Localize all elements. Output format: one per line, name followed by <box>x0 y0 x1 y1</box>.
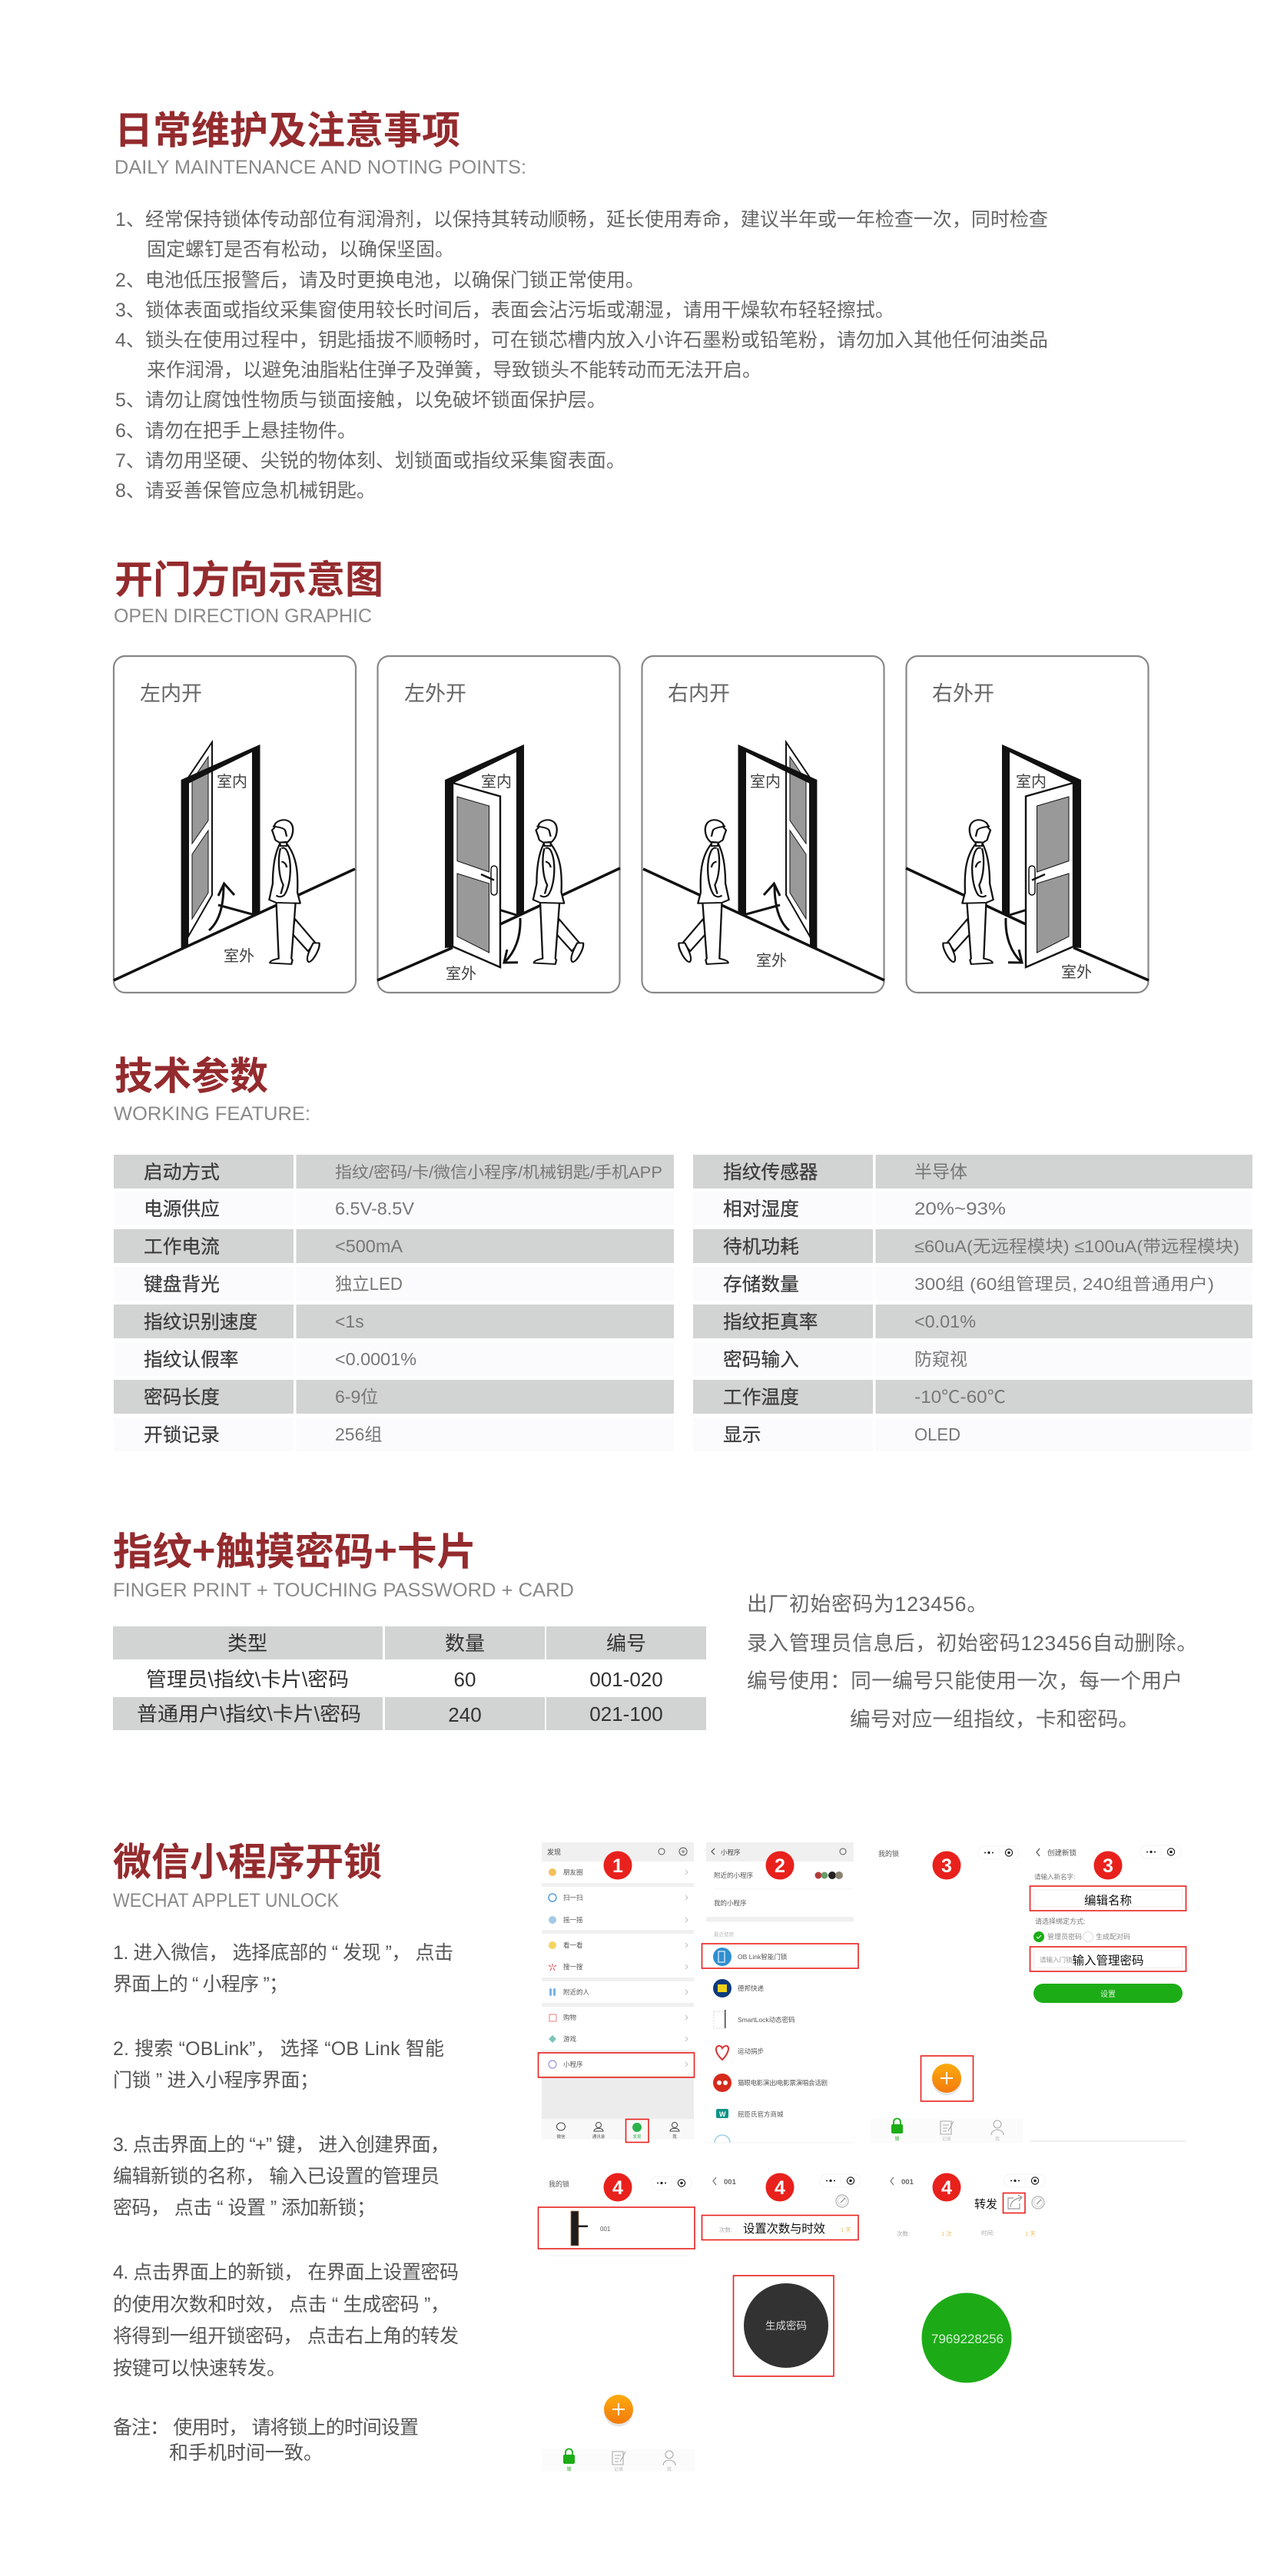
create lock interface: 请输入门锁 <box>1040 1956 1073 1964</box>
my locks list interface <box>542 2177 695 2472</box>
badge: step 4: 4 <box>775 2177 785 2199</box>
highlight: add button <box>921 2056 973 2101</box>
my locks list interface: 我的锁 <box>549 2180 569 2188</box>
figure: person <box>943 820 994 964</box>
create lock interface <box>1030 1845 1186 2141</box>
text block: instructions: 编辑新锁的名称， 输入已设置的管理员 <box>113 2166 440 2187</box>
table text: right labels: 待机功耗 <box>723 1236 799 1258</box>
generated password interface: 次数: <box>897 2230 910 2237</box>
text block: maintenance points: 8、请妥善保管应急机械钥匙。 <box>115 480 376 502</box>
generate password interface: 生成密码 <box>765 2319 807 2332</box>
discover screen interface: 摇一摇 <box>563 1916 583 1924</box>
section: fingerprint password card <box>113 1521 1197 1731</box>
table text: left labels: 密码长度 <box>144 1387 220 1408</box>
table text: user row: 240 <box>448 1703 482 1726</box>
table: technical parameters <box>114 1155 1252 1451</box>
badge: step 3: 3 <box>1103 1855 1113 1877</box>
panel: left inward <box>114 656 356 993</box>
table text: user row <box>137 1702 663 1726</box>
generated password interface: 1 天 <box>1025 2230 1036 2237</box>
create lock interface: 创建新锁 <box>1047 1848 1077 1858</box>
table text: left labels: 指纹识别速度 <box>144 1311 257 1333</box>
label: outdoor: 室外 <box>756 952 787 970</box>
text block: instructions: 备注： 使用时， 请将锁上的时间设置 <box>113 2417 419 2438</box>
table text: left values: <1s <box>335 1311 364 1331</box>
generated password interface: 时间: <box>981 2229 994 2236</box>
panel: right inward <box>642 656 884 993</box>
highlight: name field <box>1030 1886 1186 1911</box>
table text: right values: 20%~93% <box>914 1198 1006 1218</box>
discover screen interface: 扫一扫 <box>563 1894 583 1901</box>
text block: instructions <box>113 1942 459 2464</box>
create lock interface: 管理员密码 <box>1047 1932 1082 1941</box>
table text: left values: 6-9位 <box>335 1387 378 1407</box>
create lock interface: 请输入新名字: <box>1034 1873 1075 1881</box>
text block: maintenance points: 2、电池低压报警后，请及时更换电池，以确保门锁正常使用。 <box>115 270 645 291</box>
generated password interface <box>891 2174 1045 2383</box>
mini program list interface: 猫眼电影演出l电影票演唱会话剧 <box>738 2079 828 2087</box>
table text: left labels: 开锁记录 <box>144 1424 220 1446</box>
figure: person <box>269 820 320 964</box>
table text: admin row: 60 <box>454 1668 476 1691</box>
mini program list interface: OB Link智能门锁 <box>738 1953 788 1961</box>
screenshot: generated password <box>891 2173 1045 2383</box>
table text: right labels: 显示 <box>723 1425 761 1446</box>
create lock interface: 设置 <box>1100 1990 1116 1999</box>
text block: instructions: 按键可以快速转发。 <box>113 2358 286 2379</box>
section: working feature <box>114 1046 1252 1451</box>
generated password interface: 1 次 <box>941 2230 952 2237</box>
generated password interface: 001 <box>901 2178 914 2186</box>
text block: initial password note: 录入管理员信息后，初始密码123456自动删除。 <box>747 1632 1197 1655</box>
create lock interface: 生成配对码 <box>1096 1932 1130 1941</box>
label: right inward: 右内开 <box>668 682 730 705</box>
badge: step 4 <box>765 2173 795 2202</box>
section: daily maintenance <box>114 100 1048 502</box>
table text: left values: <500mA <box>335 1236 403 1256</box>
text block: maintenance points: 来作润滑，以避免油脂粘住弹子及弹簧，导致锁头不能转动而无法开启。 <box>147 360 761 381</box>
heading: working feature: 技术参数 <box>114 1046 268 1101</box>
table text: right labels: 存储数量 <box>723 1274 799 1295</box>
panel: left outward <box>377 656 620 993</box>
badge: step 4 <box>604 2173 632 2202</box>
discover screen interface: 小程序 <box>563 2060 583 2068</box>
table text: left values: 独立LED <box>335 1274 403 1294</box>
table text: admin row: 管理员\指纹\卡片\密码 <box>146 1668 349 1691</box>
callout: enter admin password: 输入管理密码 <box>1072 1954 1144 1968</box>
label: left inward: 左内开 <box>140 682 202 705</box>
table text: right labels: 指纹拒真率 <box>723 1311 818 1333</box>
callout: forward: 转发 <box>974 2198 997 2211</box>
text block: initial password note: 编号使用：同一编号只能使用一次，每一个用户 <box>747 1669 1183 1692</box>
mini program list interface: 最近使用 <box>714 1931 734 1938</box>
mini program list interface: 屈臣氏官方商城 <box>738 2110 784 2118</box>
table text: right values: OLED <box>914 1424 960 1444</box>
illustration: right outward door <box>906 744 1149 980</box>
label: outdoor: 室外 <box>446 965 476 983</box>
callout: set times and validity: 设置次数与时效 <box>743 2222 825 2236</box>
callout: edit name: 编辑名称 <box>1084 1894 1132 1908</box>
mini program list interface <box>706 1842 854 2143</box>
heading: wechat applet unlock: 微信小程序开锁 <box>113 1832 382 1887</box>
create lock interface: 请选择绑定方式: <box>1035 1917 1086 1925</box>
text block: instructions: 4. 点击界面上的新锁， 在界面上设置密码 <box>113 2262 459 2283</box>
illustration: left outward door <box>377 744 620 980</box>
table text: left labels: 指纹认假率 <box>144 1349 238 1371</box>
discover screen interface: 发现 <box>632 2133 642 2140</box>
mini program list interface: 德邦快递 <box>738 1984 765 1992</box>
table text: user row: 021-100 <box>589 1702 663 1726</box>
text block: maintenance points: 固定螺钉是否有松动，以确保坚固。 <box>147 239 454 260</box>
text block: maintenance points: 6、请勿在把手上悬挂物件。 <box>115 420 357 442</box>
highlight: mini program row <box>538 2053 695 2077</box>
label: outdoor: 室外 <box>224 947 254 965</box>
subtitle: wechat applet unlock: WECHAT APPLET UNLOCK <box>113 1890 339 1911</box>
discover screen interface: 我 <box>672 2133 677 2140</box>
label: left outward: 左外开 <box>404 682 466 705</box>
discover screen interface: 游戏 <box>563 2035 577 2043</box>
screenshot: my locks empty <box>871 1846 1023 2143</box>
table text: admin row <box>146 1668 663 1691</box>
table text: right values: 半导体 <box>914 1162 967 1182</box>
my locks list interface: 001 <box>600 2226 611 2233</box>
badge: step 2 <box>765 1852 795 1879</box>
table text: right values: <0.01% <box>914 1311 976 1331</box>
mini program list interface: 运动捐步 <box>738 2047 764 2055</box>
heading: fingerprint password card: 指纹+触摸密码+卡片 <box>113 1521 476 1576</box>
label: indoor: 室内 <box>481 773 512 791</box>
figure: person <box>533 820 583 964</box>
illustration: left inward door <box>114 742 355 980</box>
panel: right outward <box>906 656 1149 993</box>
table text: right labels: 相对湿度 <box>723 1198 799 1220</box>
my locks empty interface <box>871 1846 1023 2143</box>
screenshot: mini program list <box>702 1842 858 2143</box>
table text: left labels: 键盘背光 <box>144 1274 220 1295</box>
table text: header row: 数量 <box>445 1632 485 1655</box>
table text: right values <box>914 1162 1239 1444</box>
table text: admin row: 001-020 <box>589 1668 663 1691</box>
table text: left labels: 启动方式 <box>144 1162 220 1183</box>
screenshot: my locks with lock <box>538 2173 695 2472</box>
text block: instructions: 界面上的 “ 小程序 ”； <box>113 1974 288 1995</box>
mini program list interface: 小程序 <box>721 1848 741 1856</box>
text block: maintenance points <box>115 209 1048 502</box>
generate password interface: 次数: <box>719 2226 732 2233</box>
table text: left values: <0.0001% <box>335 1349 416 1369</box>
heading: open direction: 开门方向示意图 <box>114 549 383 605</box>
text block: initial password note: 出厂初始密码为123456。 <box>747 1593 987 1616</box>
text block: instructions: 3. 点击界面上的 “+” 键， 进入创建界面， <box>113 2134 450 2156</box>
text block: maintenance points: 7、请勿用坚硬、尖锐的物体刻、划锁面或指纹采集窗表面。 <box>115 450 625 472</box>
badge: step 2: 2 <box>775 1855 785 1877</box>
mini program list interface: 附近的小程序 <box>714 1871 754 1879</box>
discover screen interface: 通讯录 <box>592 2133 605 2140</box>
badge: step 4: 4 <box>941 2177 952 2199</box>
text block: maintenance points: 4、锁头在使用过程中，钥匙插拔不顺畅时，可在锁芯槽内放入小许石墨粉或铅笔粉，请勿加入其他任何油类品 <box>115 330 1048 351</box>
table text: right labels <box>723 1162 818 1446</box>
highlight: share button <box>1004 2193 1025 2213</box>
table text: left values <box>335 1164 662 1444</box>
badge: step 3 <box>933 1852 960 1879</box>
section: wechat applet unlock <box>113 1832 1186 2472</box>
subtitle: working feature: WORKING FEATURE: <box>114 1103 310 1125</box>
table text: right labels: 工作温度 <box>723 1387 799 1408</box>
mini program list interface: W <box>719 2110 726 2118</box>
text block: maintenance points: 5、请勿让腐蚀性物质与锁面接触，以免破坏锁面保护层。 <box>115 390 606 411</box>
discover screen interface: 搜一搜 <box>563 1963 583 1971</box>
discover screen interface: 附近的人 <box>563 1988 590 1996</box>
badge: step 4 <box>933 2173 960 2202</box>
table text: right labels: 指纹传感器 <box>723 1162 818 1183</box>
discover screen interface <box>542 1842 694 2140</box>
badge: step 3 <box>1094 1852 1122 1879</box>
table text: left labels: 工作电流 <box>144 1236 220 1258</box>
figure: person <box>678 820 729 964</box>
text block: initial password note: 编号对应一组指纹，卡和密码。 <box>850 1708 1139 1731</box>
mini program list interface: 我的小程序 <box>714 1899 747 1907</box>
label: outdoor: 室外 <box>1061 963 1092 981</box>
table text: left values: 6.5V-8.5V <box>335 1198 415 1218</box>
table text: header row <box>227 1632 646 1655</box>
table text: user row: 普通用户\指纹\卡片\密码 <box>137 1702 361 1726</box>
screenshot: discover screen <box>538 1842 695 2142</box>
badge: step 1 <box>604 1852 632 1879</box>
text block: maintenance points: 3、锁体表面或指纹采集窗使用较长时间后，表面会沾污垢或潮湿，请用干燥软布轻轻擦拭。 <box>115 300 894 321</box>
text block: instructions: 门锁 ” 进入小程序界面； <box>113 2070 319 2091</box>
label: indoor: 室内 <box>750 773 781 791</box>
table text: left values: 256组 <box>335 1424 382 1444</box>
mini program list interface: SmartLock动态密码 <box>738 2016 795 2024</box>
discover screen interface: 微信 <box>556 2133 566 2140</box>
highlight: times and validity <box>702 2216 858 2240</box>
text block: instructions: 将得到一组开锁密码， 点击右上角的转发 <box>113 2326 459 2347</box>
generate password interface: 001 <box>724 2178 737 2186</box>
subtitle: fingerprint password card: FINGER PRINT + TOUCHING PASSWORD + CARD <box>113 1580 574 1601</box>
icon: share <box>1008 2195 1022 2209</box>
label: indoor: 室内 <box>217 773 247 791</box>
table text: right values: -10℃-60℃ <box>914 1387 1006 1407</box>
table text: right labels: 密码输入 <box>723 1349 799 1371</box>
discover screen interface: 购物 <box>563 2014 577 2021</box>
badge: step 1: 1 <box>612 1855 623 1877</box>
subtitle: daily maintenance: DAILY MAINTENANCE AND NOTING POINTS: <box>114 157 526 178</box>
table text: left values: 指纹/密码/卡/微信小程序/机械钥匙/手机APP <box>335 1164 662 1182</box>
highlight: discover tab <box>625 2119 649 2142</box>
text block: instructions: 密码， 点击 “ 设置 ” 添加新锁； <box>113 2197 376 2219</box>
table: user types <box>113 1626 706 1730</box>
badge: step 4: 4 <box>612 2177 623 2199</box>
section: open direction <box>114 549 1149 993</box>
discover screen interface: 看一看 <box>563 1941 583 1949</box>
subtitle: open direction: OPEN DIRECTION GRAPHIC <box>114 605 372 627</box>
text block: instructions: 和手机时间一致。 <box>169 2442 323 2464</box>
text block: instructions: 的使用次数和时效， 点击 “ 生成密码 ”， <box>113 2294 450 2316</box>
table text: right values: 300组 (60组管理员, 240组普通用户) <box>914 1275 1214 1294</box>
table text: header row: 类型 <box>227 1632 267 1655</box>
table text: right values: 防窥视 <box>914 1349 967 1369</box>
table text: right values: ≤60uA(无远程模块) ≤100uA(带远程模块) <box>914 1237 1239 1256</box>
illustration: right inward door <box>643 742 884 980</box>
highlight: OB Link row <box>702 1944 858 1968</box>
table text: left labels <box>144 1162 257 1446</box>
generated password interface: 7969228256 <box>931 2332 1004 2346</box>
generate password interface <box>713 2174 861 2368</box>
generate password interface: 1 天 <box>841 2226 851 2233</box>
my locks empty interface: 我的锁 <box>878 1849 899 1858</box>
screenshot: generate password <box>702 2173 861 2376</box>
label: indoor: 室内 <box>1016 773 1047 791</box>
highlight: lock row <box>538 2207 695 2249</box>
text block: maintenance points: 1、经常保持锁体传动部位有润滑剂，以保持其转动顺畅，延长使用寿命，建议半年或一年检查一次，同时检查 <box>115 209 1048 230</box>
table text: header row: 编号 <box>606 1632 646 1655</box>
discover screen interface: 朋友圈 <box>563 1868 583 1876</box>
discover screen interface: 发现 <box>547 1848 561 1856</box>
label: right outward: 右外开 <box>932 682 994 705</box>
highlight: generate button <box>733 2276 834 2376</box>
heading: daily maintenance: 日常维护及注意事项 <box>114 100 460 155</box>
screenshot: create lock <box>1030 1845 1186 2141</box>
highlight: password field <box>1030 1947 1186 1971</box>
text block: instructions: 1. 进入微信， 选择底部的 “ 发现 ”， 点击 <box>113 1942 453 1964</box>
text block: instructions: 2. 搜索 “OBLink”， 选择 “OB Link 智能 <box>113 2038 444 2060</box>
badge: step 3: 3 <box>941 1855 952 1877</box>
text block: initial password note <box>747 1593 1197 1731</box>
table text: left labels: 电源供应 <box>144 1198 220 1220</box>
